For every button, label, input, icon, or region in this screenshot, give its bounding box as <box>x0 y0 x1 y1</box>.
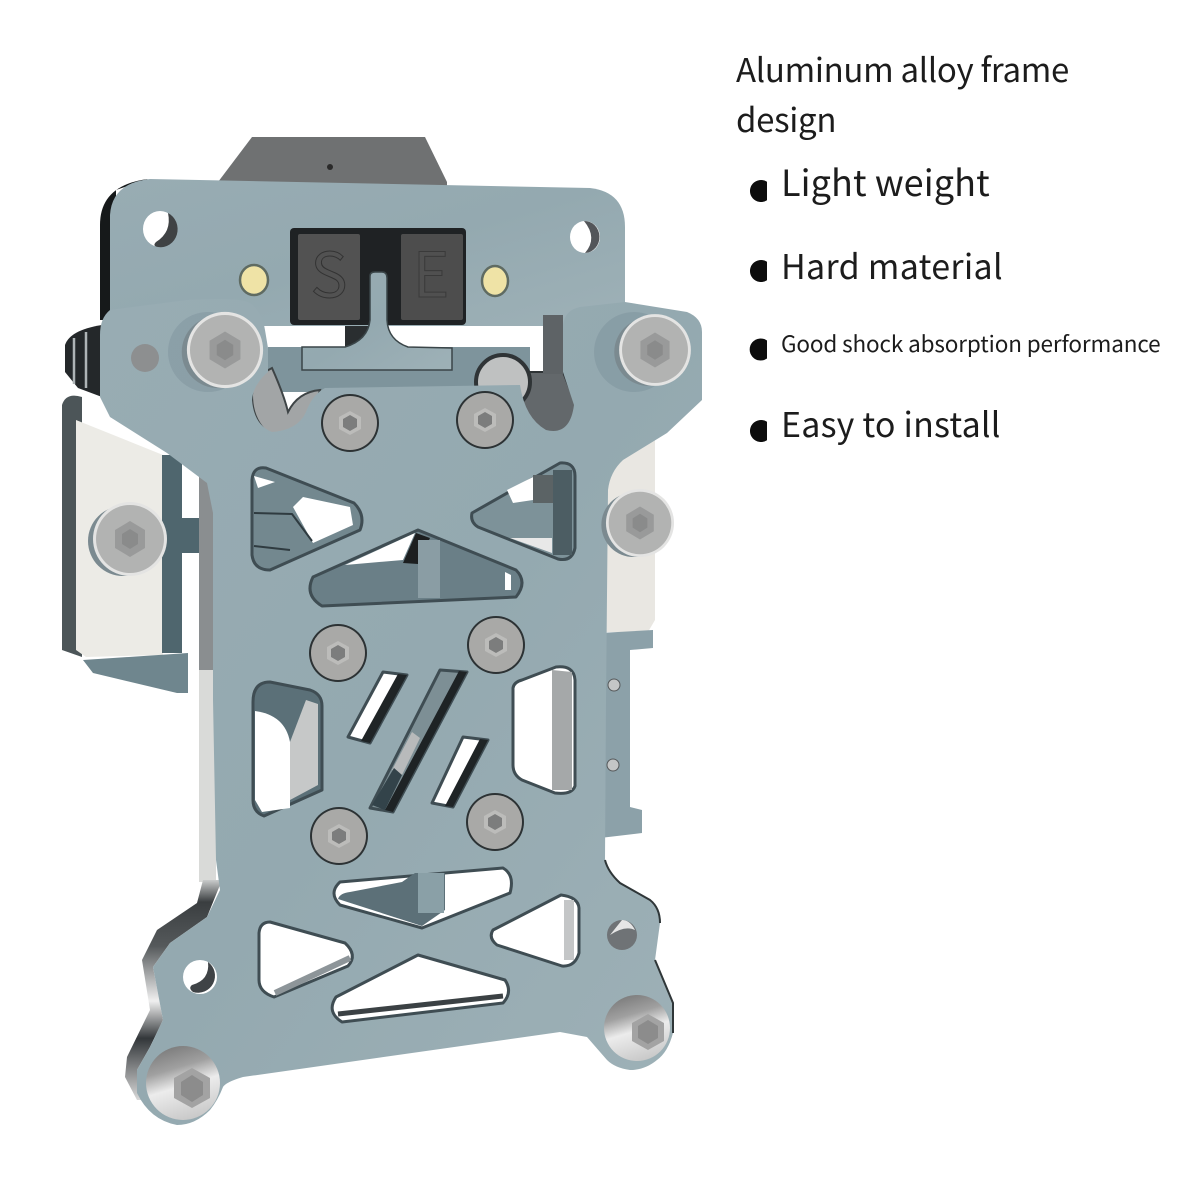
gold pins <box>240 265 508 296</box>
cutout: upper left triangle <box>252 468 362 570</box>
heading: design <box>736 94 836 142</box>
bullet: easy to install: Easy to install <box>781 398 1001 447</box>
cutout: small round holes <box>183 920 637 994</box>
cutout: slash three <box>432 737 488 807</box>
cutout: bottom diamond <box>332 955 509 1022</box>
lower left plate strip <box>199 670 216 882</box>
cutout: slash one <box>348 672 407 743</box>
cutout: left window <box>253 682 322 816</box>
T-shaped tab <box>302 272 452 370</box>
white slot under block <box>262 326 546 348</box>
black connector block: S <box>311 225 347 315</box>
right lower bracket <box>600 630 653 838</box>
rivet left <box>131 344 159 372</box>
polished outer edge <box>125 880 222 1100</box>
notch clip right <box>476 315 576 434</box>
cutout: lower centre <box>334 868 511 928</box>
main frame plate <box>100 299 702 1125</box>
cutout: upper right triangle <box>472 463 575 560</box>
plate holes <box>143 211 600 253</box>
notch clip left <box>252 368 320 436</box>
upper mounting plate <box>100 179 625 330</box>
screws: small countersunk <box>309 391 525 865</box>
recessed plate behind tab <box>268 347 530 392</box>
screws: bottom domes <box>146 995 670 1120</box>
stacked rear plate edges on left <box>65 325 102 397</box>
heading: Aluminum alloy frame <box>736 44 1069 92</box>
cast edge along lower right <box>605 860 673 1033</box>
cutout: right window <box>513 667 575 793</box>
cutout: lower left triangle <box>259 922 352 997</box>
cutout: slash two <box>370 670 467 812</box>
black connector block <box>290 225 466 325</box>
bullet: hard material: Hard material <box>781 240 1003 289</box>
top grey bracket <box>215 137 447 200</box>
connector shadow <box>345 326 368 347</box>
cutouts <box>183 463 637 1022</box>
cutout: lower right triangle <box>491 895 579 966</box>
cutout: central diamond <box>310 530 522 606</box>
screws: large socket heads <box>88 312 691 576</box>
black connector block: E <box>413 225 449 315</box>
screw shadows on plate <box>168 312 674 392</box>
left bracket assembly <box>62 396 215 693</box>
right white panel <box>605 430 655 632</box>
bullet: shock absorption: Good shock absorption performance <box>781 327 1160 359</box>
bullet: light weight: Light weight <box>781 155 990 207</box>
